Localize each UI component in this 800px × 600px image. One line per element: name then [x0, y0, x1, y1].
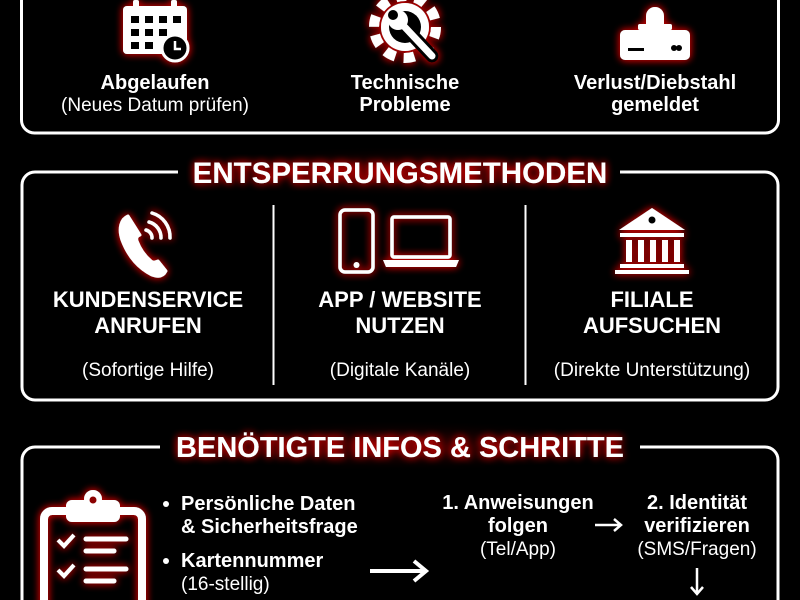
text: step 2: 2. Identität [647, 492, 747, 514]
text: expired: Abgelaufen [101, 72, 209, 94]
panel: unlock methods: (Direkte Unterstützung) [554, 360, 750, 381]
panel: reasons: Probleme [359, 94, 451, 116]
text: call service: KUNDENSERVICE [53, 287, 243, 312]
panel: unlock methods: (Sofortige Hilfe) [82, 360, 214, 381]
text: step 1: 1. Anweisungen [442, 492, 594, 514]
heading: steps: BENÖTIGTE INFOS & SCHRITTE [176, 431, 624, 464]
panel: infos and steps: verifizieren [644, 515, 750, 537]
panel: infos and steps: folgen [488, 515, 548, 537]
panel: reasons: gemeldet [611, 94, 699, 116]
panel: infos and steps: (Tel/App) [480, 539, 556, 560]
panel: infos and steps: (SMS/Fragen) [637, 539, 757, 560]
icon: phone [120, 213, 170, 276]
panel: unlock methods: (Digitale Kanäle) [330, 360, 470, 381]
text: app website: APP / WEBSITE [318, 287, 482, 312]
panel: unlock methods: NUTZEN [355, 313, 445, 338]
panel: infos and steps [22, 420, 778, 600]
arrow: step1 to step2 [595, 519, 621, 531]
panel: reasons: (Neues Datum prüfen) [61, 95, 249, 116]
text: technical: Technische [351, 72, 459, 94]
icon: alarm card [620, 7, 690, 60]
arrow: to steps [370, 561, 426, 581]
icon: devices [340, 210, 459, 272]
list: required info: Persönliche Daten [181, 493, 356, 515]
panel: unlock methods: ANRUFEN [94, 313, 202, 338]
arrow: down [691, 568, 703, 594]
text: branch: FILIALE [610, 287, 694, 312]
text: loss: Verlust/Diebstahl [574, 72, 736, 94]
panel: unlock methods: AUFSUCHEN [583, 313, 721, 338]
list: required info [163, 493, 358, 595]
list: required info: & Sicherheitsfrage [181, 516, 358, 538]
icon: calendar [123, 0, 188, 61]
icon: gear wrench [374, 0, 436, 58]
list: required info: (16-stellig) [181, 574, 270, 595]
list: required info: Kartennummer [181, 550, 323, 572]
panel: reasons [22, 0, 778, 133]
icon: bank [615, 208, 689, 274]
panel: unlock methods [22, 146, 778, 400]
icon: clipboard [44, 490, 142, 600]
heading: methods: ENTSPERRUNGSMETHODEN [193, 157, 607, 190]
